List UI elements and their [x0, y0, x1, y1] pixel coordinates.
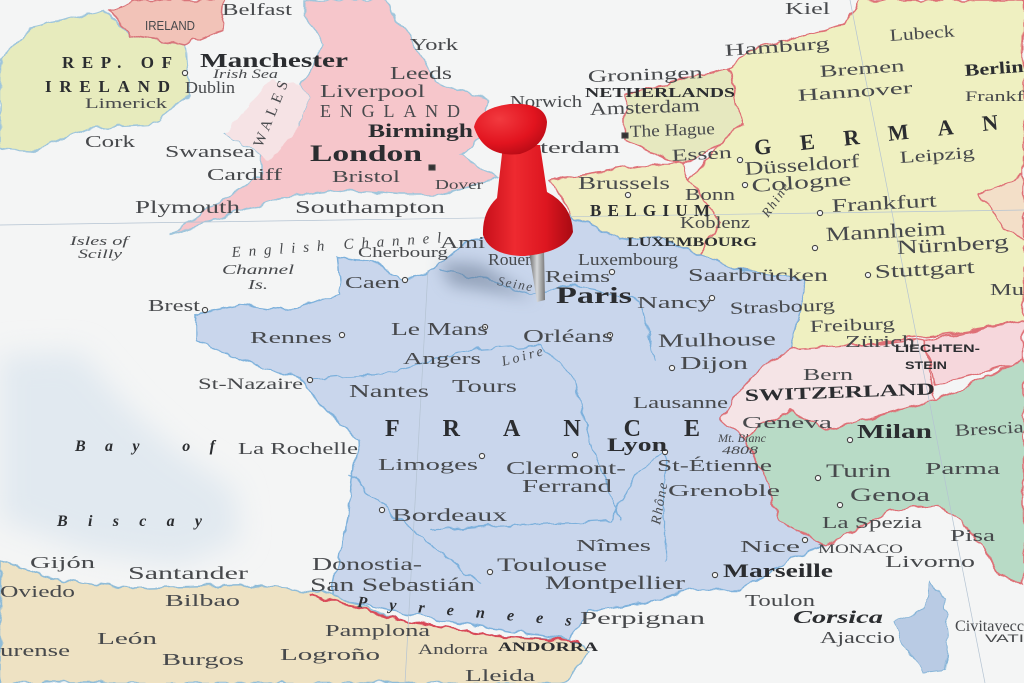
labels: British Isles: Bristol — [332, 167, 400, 186]
labels: Spain: Pamplona — [325, 621, 431, 640]
city markers — [182, 70, 871, 578]
labels: Benelux and Germany: Cologne — [751, 169, 852, 197]
labels: France: Nîmes — [576, 536, 651, 555]
country: Italy — [745, 360, 1024, 585]
labels: Benelux and Germany: Amsterdam — [589, 95, 700, 119]
labels: Benelux and Germany: Hamburg — [724, 34, 831, 60]
labels: British Isles: Manchester — [200, 50, 348, 72]
labels: France: Mulhouse — [658, 329, 776, 352]
labels: Switzerland and Italy: Pisa — [950, 526, 996, 545]
labels: France: Dijon — [680, 353, 748, 373]
labels: France: Paris — [556, 283, 632, 308]
labels: Spain: León — [97, 629, 158, 648]
labels: Switzerland and Italy: SWITZERLAND — [744, 379, 935, 405]
labels: Switzerland and Italy: Bern — [803, 365, 854, 384]
country: Netherlands — [625, 68, 742, 165]
labels: British Isles: Birmingh — [368, 121, 474, 142]
country: Spain — [0, 562, 590, 683]
labels: Benelux and Germany: Rhine — [758, 180, 792, 221]
labels: Benelux and Germany: Bonn — [685, 185, 736, 204]
labels: France: Loire — [499, 345, 545, 370]
labels: Spain: Oviedo — [0, 582, 75, 601]
labels: British Isles: Dublin — [185, 78, 236, 97]
labels: France: Bay of — [74, 438, 217, 455]
labels: British Isles: London — [310, 141, 422, 166]
labels: Benelux and Germany: Saarbrücken — [688, 265, 828, 285]
labels: Switzerland and Italy: MONACO — [818, 541, 903, 556]
labels: Spain: Burgos — [162, 650, 244, 669]
labels: British Isles: Belfast — [222, 0, 292, 19]
labels: France: Ami — [440, 233, 485, 252]
labels: British Isles: York — [410, 35, 459, 54]
labels: Switzerland and Italy: STEIN — [905, 360, 947, 372]
labels: British Isles: Is. — [247, 278, 268, 293]
labels: Switzerland and Italy: Milan — [857, 421, 932, 443]
labels: Spain: Gijón — [30, 553, 96, 572]
country: Northern Ireland — [110, 0, 225, 45]
labels: France: Montpellier — [545, 573, 686, 594]
labels: Spain — [0, 553, 599, 683]
labels: France: Tours — [452, 376, 517, 396]
labels: Switzerland and Italy: Civitavecc — [955, 618, 1024, 635]
labels: Benelux and Germany: Mannheim — [825, 218, 947, 246]
labels: Switzerland and Italy: Corsica — [793, 607, 883, 627]
labels: France: Reims — [545, 267, 610, 286]
labels: Benelux and Germany: NETHERLANDS — [585, 86, 735, 101]
labels: France: Biscay — [56, 513, 203, 530]
labels: Spain: Andorra — [418, 642, 488, 658]
labels: Spain: ANDORRA — [498, 639, 599, 654]
labels: British Isles: Leeds — [390, 63, 452, 83]
labels: France: Rennes — [250, 328, 332, 347]
labels: France: Grenoble — [668, 481, 780, 500]
labels: British Isles: Scilly — [78, 246, 122, 261]
labels: Spain: Donostia- — [312, 554, 422, 574]
labels: Benelux and Germany: terdam — [540, 138, 620, 157]
labels: France: Angers — [403, 349, 481, 368]
labels: British Isles: Dover — [435, 178, 483, 193]
labels: Benelux and Germany: Brussels — [578, 173, 670, 193]
country: Poland edge — [980, 175, 1024, 240]
labels: British Isles: Plymouth — [135, 197, 240, 217]
labels: Benelux and Germany: GERMAN — [753, 109, 999, 160]
labels: British Isles: Liverpool — [320, 81, 425, 101]
labels: Switzerland and Italy: Ajaccio — [820, 628, 895, 647]
labels: France: Rhône — [649, 482, 671, 527]
labels: British Isles: WALES — [251, 79, 292, 149]
labels: France: Caen — [345, 273, 401, 292]
labels: Benelux and Germany: Frankf — [965, 89, 1024, 105]
rivers of France — [310, 270, 665, 585]
labels: Benelux and Germany — [540, 0, 1024, 336]
labels: Spain: Pyrenees — [356, 594, 572, 630]
pin head — [474, 104, 547, 154]
labels: France: Lyon — [607, 435, 668, 456]
labels: Benelux and Germany: Berlin — [964, 57, 1024, 80]
labels: France: Nantes — [349, 381, 429, 401]
labels: France: Perpignan — [580, 608, 705, 628]
labels: Spain: San Sebastián — [310, 575, 476, 596]
country: France — [195, 215, 825, 640]
labels: France: Marseille — [723, 561, 833, 582]
labels: Switzerland and Italy: LIECHTEN- — [895, 343, 980, 355]
pin body — [483, 145, 573, 256]
country: United Kingdom — [170, 0, 497, 235]
labels: Benelux and Germany: Mu — [990, 280, 1024, 299]
island: Corsica — [895, 582, 948, 672]
labels: France: Bordeaux — [392, 505, 507, 525]
labels: Benelux and Germany: Koblenz — [680, 213, 751, 232]
labels: France: Le Mans — [391, 319, 488, 339]
labels: British Isles: IRELAND — [45, 77, 170, 96]
labels: Switzerland and Italy: Genoa — [850, 485, 931, 506]
labels: British Isles: Norwich — [510, 92, 583, 111]
country: Belgium — [550, 165, 720, 255]
labels: Switzerland and Italy: Parma — [925, 459, 1001, 478]
labels: British Isles: Irish Sea — [212, 66, 279, 81]
pin needle — [529, 250, 545, 302]
labels: France: Orléans — [523, 326, 613, 346]
labels: British Isles: Isles of — [68, 233, 132, 248]
country: Germany — [690, 0, 1024, 350]
labels: France: Lausanne — [633, 393, 728, 412]
labels: France: St-Nazaire — [198, 376, 303, 393]
labels: Benelux and Germany: Stuttgart — [874, 257, 976, 283]
labels: Switzerland and Italy: VATI — [985, 633, 1024, 645]
border: Pyrenees — [310, 595, 580, 642]
region: Wales — [225, 80, 310, 160]
country: Switzerland — [722, 340, 935, 440]
labels: France: Nancy — [637, 293, 713, 312]
labels: Switzerland and Italy: Brescia — [954, 417, 1024, 440]
labels: British Isles: Southampton — [295, 197, 445, 217]
labels: France: La Rochelle — [238, 439, 358, 458]
labels: Switzerland and Italy: Zürich — [845, 332, 916, 351]
labels: British Isles: IRELAND — [145, 18, 195, 33]
labels: Switzerland and Italy: La Spezia — [822, 513, 923, 532]
labels: Switzerland and Italy — [717, 332, 1024, 647]
labels: Benelux and Germany: The Hague — [629, 119, 715, 141]
labels: Benelux and Germany: BELGIUM — [590, 201, 710, 220]
labels: France: Toulouse — [497, 555, 607, 576]
labels: France: Ferrand — [522, 476, 612, 496]
labels: Switzerland and Italy: Geneva — [742, 413, 833, 432]
labels: British Isles — [45, 0, 583, 293]
labels: Switzerland and Italy: 4808 — [722, 443, 758, 457]
labels: France: Clermont- — [506, 458, 626, 478]
labels: British Isles: Channel — [222, 263, 294, 278]
labels: France: St-Étienne — [657, 456, 772, 475]
labels: Benelux and Germany: Essen — [671, 143, 733, 165]
labels: Spain: Bilbao — [165, 591, 240, 610]
labels: British Isles: English Channel — [230, 230, 442, 261]
labels: British Isles: Cork — [85, 132, 136, 151]
labels: Spain: Santander — [128, 563, 248, 583]
labels: British Isles: REP. OF — [62, 53, 172, 72]
labels: British Isles: Swansea — [165, 142, 256, 161]
bay of biscay shading — [0, 352, 240, 565]
labels: France — [56, 233, 833, 628]
labels: Benelux and Germany: Lubeck — [889, 21, 956, 45]
labels: Benelux and Germany: Leipzig — [899, 143, 976, 167]
labels: France: Cherbourg — [358, 245, 449, 261]
labels: France: Limoges — [378, 455, 478, 474]
labels: Benelux and Germany: Luxembourg — [578, 250, 679, 269]
pin shadow — [440, 262, 535, 298]
labels: Spain: Logroño — [280, 645, 380, 664]
labels: France: Brest — [148, 296, 200, 315]
labels: Benelux and Germany: Freiburg — [809, 314, 896, 336]
labels: Benelux and Germany: Hannover — [797, 78, 914, 105]
icon: red push pin — [474, 104, 573, 302]
labels: France: Toulon — [745, 591, 816, 610]
labels: Switzerland and Italy: Mt. Blanc — [717, 431, 767, 445]
labels: Spain: urense — [0, 641, 70, 660]
labels: France: Nice — [740, 537, 800, 556]
labels: France: FRANCE — [385, 416, 700, 442]
labels: British Isles: Cardiff — [207, 165, 283, 184]
labels: British Isles: ENGLAND — [320, 101, 460, 121]
labels: Benelux and Germany: Frankfurt — [831, 190, 938, 217]
labels: Benelux and Germany: LUXEMBOURG — [627, 234, 757, 249]
labels: Switzerland and Italy: Turin — [826, 461, 892, 482]
labels: Benelux and Germany: Bremen — [819, 56, 906, 81]
labels: Benelux and Germany: Düsseldorf — [744, 151, 861, 180]
labels: France: Rouen — [488, 250, 535, 269]
labels: France: Seine — [496, 273, 534, 294]
labels: Benelux and Germany: Strasbourg — [729, 295, 836, 318]
labels: British Isles: Limerick — [85, 96, 168, 112]
country: Austria edge — [925, 320, 1024, 385]
labels: Switzerland and Italy: Livorno — [885, 552, 975, 571]
labels: Benelux and Germany: Groningen — [587, 63, 704, 86]
country: Ireland — [0, 10, 190, 152]
labels: Benelux and Germany: Nürnberg — [896, 231, 1009, 259]
